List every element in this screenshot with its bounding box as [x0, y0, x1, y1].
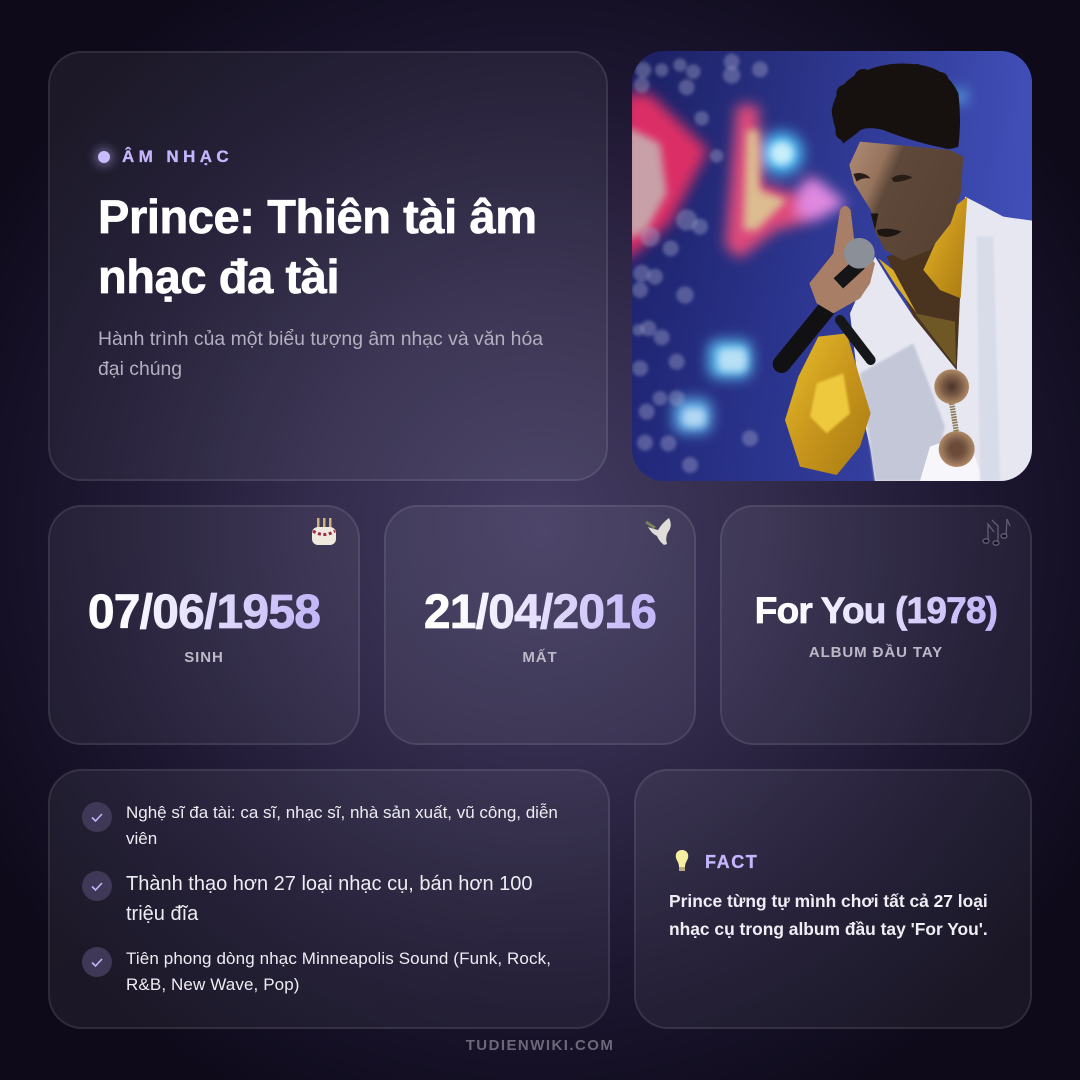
- footer watermark: TUDIENWIKI.COM: [466, 1037, 614, 1054]
- stage lights: [623, 54, 967, 473]
- icon: light bulb: [676, 850, 688, 871]
- label: ALBUM ĐẦU TAY: [809, 644, 943, 661]
- photo: Prince singing on stage: [632, 51, 1032, 481]
- icon: birthday cake: [312, 518, 336, 545]
- list item 2: triệu đĩa: [126, 903, 198, 925]
- gold collar: [923, 197, 967, 298]
- list item 1: [126, 803, 558, 848]
- fact text: Prince từng tự mình chơi tất cả 27 loại: [669, 891, 988, 911]
- list item 1: Nghệ sĩ đa tài: ca sĩ, nhạc sĩ, nhà sản xuất, vũ công, diễn: [126, 803, 558, 822]
- subtitle: đại chúng: [98, 358, 182, 380]
- chest and neck: [887, 237, 960, 370]
- title: [98, 190, 537, 303]
- panel: fact: [634, 769, 1032, 1029]
- stage background: [632, 51, 1032, 481]
- title: nhạc đa tài: [98, 250, 339, 303]
- value: 07/06/1958: [88, 586, 320, 639]
- list item 3: Tiên phong dòng nhạc Minneapolis Sound (Funk, Rock,: [126, 949, 551, 968]
- medallions: [934, 369, 975, 467]
- icon: music notes: [982, 518, 1010, 546]
- panel: hero: [48, 51, 608, 481]
- label: MẤT: [522, 649, 558, 666]
- subtitle: [98, 328, 544, 380]
- panel: highlights list: [48, 769, 610, 1029]
- check icon 1: [82, 802, 112, 832]
- hair: [832, 64, 960, 149]
- microphone: [782, 280, 850, 364]
- fact text: [669, 891, 988, 939]
- category label: ÂM NHẠC: [122, 147, 233, 166]
- check icon 2: [82, 871, 112, 901]
- title: Prince: Thiên tài âm: [98, 190, 537, 243]
- icon: dove: [645, 518, 671, 545]
- gold sleeve: [785, 333, 871, 475]
- list item 1: viên: [126, 829, 157, 848]
- label: SINH: [184, 649, 224, 666]
- panel: first album stat: [720, 505, 1032, 745]
- panel: death date stat: [384, 505, 696, 745]
- face: [849, 142, 963, 261]
- microphone head: [844, 238, 875, 269]
- value: 21/04/2016: [424, 586, 656, 639]
- check icon 3: [82, 947, 112, 977]
- panel: birth date stat: [48, 505, 360, 745]
- list item 3: R&B, New Wave, Pop): [126, 975, 300, 994]
- singer: [782, 64, 1032, 481]
- value: For You (1978): [755, 590, 997, 631]
- category dot: [98, 151, 110, 163]
- fact heading: FACT: [705, 852, 758, 872]
- fact text: nhạc cụ trong album đầu tay 'For You'.: [669, 919, 988, 939]
- jacket: [850, 197, 1032, 481]
- list item 2: Thành thạo hơn 27 loại nhạc cụ, bán hơn 100: [126, 873, 533, 895]
- list item 2: [126, 873, 533, 925]
- subtitle: Hành trình của một biểu tượng âm nhạc và văn hóa: [98, 328, 543, 350]
- hand: [809, 206, 875, 313]
- list item 3: [126, 949, 551, 994]
